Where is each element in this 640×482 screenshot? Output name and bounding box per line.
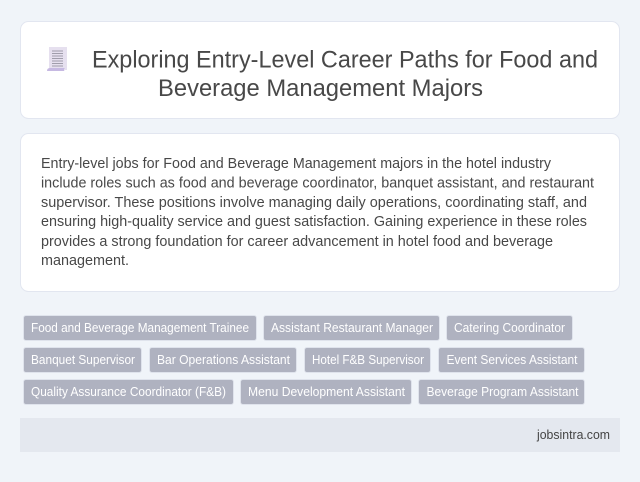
footer source: jobsintra.com bbox=[536, 427, 610, 442]
tag: Bar Operations Assistant bbox=[157, 352, 290, 367]
tag bbox=[446, 316, 572, 340]
tag bbox=[264, 316, 440, 340]
tag: Beverage Program Assistant bbox=[426, 384, 579, 399]
tag: Banquet Supervisor bbox=[31, 352, 136, 367]
tag: Hotel F&B Supervisor bbox=[312, 352, 425, 367]
tag bbox=[438, 348, 584, 372]
text block: description bbox=[41, 155, 595, 269]
title: Exploring Entry-Level Career Paths for Food and bbox=[92, 46, 598, 74]
tag bbox=[24, 348, 142, 372]
tag bbox=[304, 348, 430, 372]
tag: Catering Coordinator bbox=[454, 320, 566, 335]
icon: document bbox=[47, 47, 67, 71]
text block: description: management. bbox=[41, 252, 129, 269]
text block: description: ensuring high-quality service and guest satisfaction. Gaining experience in these roles bbox=[41, 213, 587, 230]
panel: header bbox=[20, 22, 620, 118]
tag: Event Services Assistant bbox=[446, 352, 578, 367]
tag bbox=[24, 316, 256, 340]
tag: Food and Beverage Management Trainee bbox=[31, 320, 249, 335]
tag: Quality Assurance Coordinator (F&B) bbox=[31, 384, 226, 399]
tag bbox=[240, 380, 412, 404]
title: Beverage Management Majors bbox=[158, 75, 483, 102]
text block: description: provides a strong foundation for career advancement in hotel food and beverage bbox=[41, 233, 553, 250]
tag bbox=[150, 348, 296, 372]
text block: description: supervisor. These positions involve managing daily operations, coordinating staff, and bbox=[41, 194, 587, 211]
text block: description: include roles such as food and beverage coordinator, banquet assistant, and restaurant bbox=[41, 174, 595, 192]
footer bar bbox=[20, 418, 620, 452]
tag bbox=[418, 380, 584, 404]
tag: Assistant Restaurant Manager bbox=[271, 320, 434, 335]
tag: Menu Development Assistant bbox=[248, 384, 405, 399]
tag bbox=[24, 380, 234, 404]
title bbox=[92, 46, 598, 102]
panel: description bbox=[20, 134, 620, 292]
tag list bbox=[24, 316, 584, 404]
text block: description: Entry-level jobs for Food and Beverage Management majors in the hotel industry bbox=[41, 155, 551, 172]
